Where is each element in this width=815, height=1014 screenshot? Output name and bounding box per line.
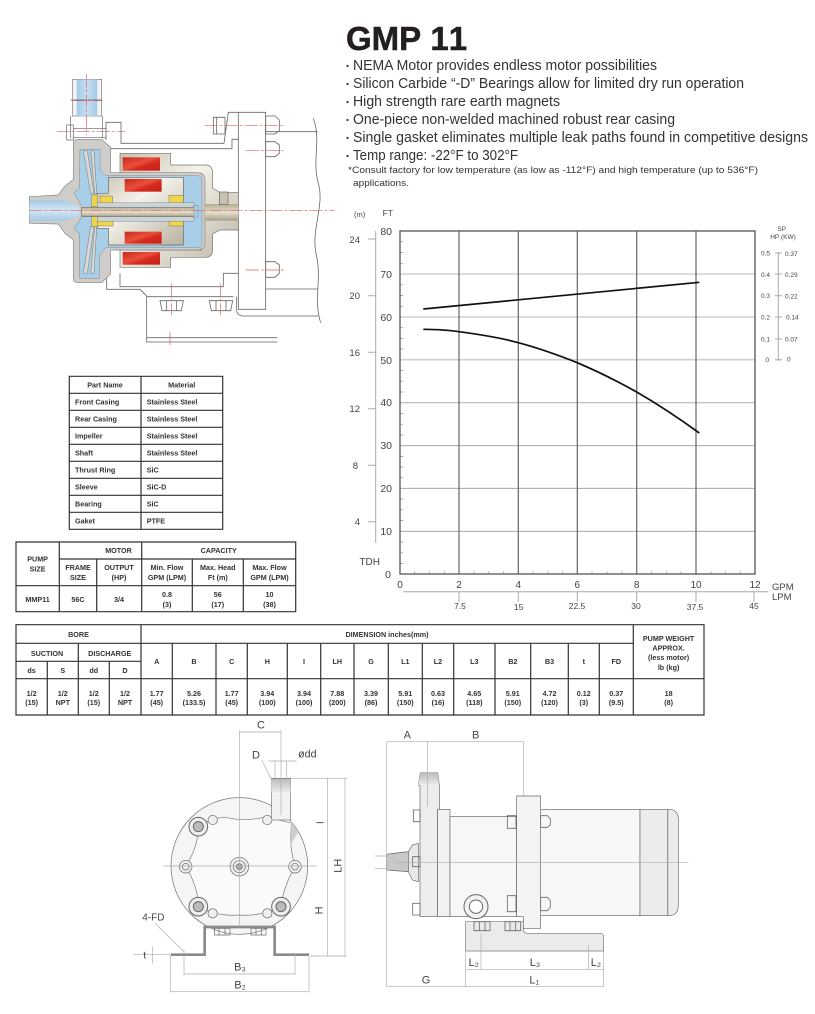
dimension labels <box>404 729 601 986</box>
dimension table: (9.5) <box>609 698 624 707</box>
mounting foot <box>147 297 277 342</box>
materials table: SiC-D <box>147 482 166 492</box>
motor <box>541 809 678 916</box>
materials table: SiC <box>147 500 159 508</box>
dimension table: NPT <box>56 698 71 707</box>
motor and capacity table: 56 <box>214 590 222 599</box>
title: GMP 11 <box>346 20 467 57</box>
materials table: Part Name <box>87 380 123 390</box>
dimension table: (86) <box>365 698 378 707</box>
motor and capacity table <box>16 542 296 612</box>
side port <box>464 895 488 919</box>
dimension table: NPT <box>118 698 133 707</box>
foot plate <box>466 922 604 951</box>
materials table: Front Casing <box>75 398 119 406</box>
dimension table: (133.5) <box>183 698 206 707</box>
metre axis: 24 <box>349 235 360 246</box>
dimension table: 3.39 <box>364 689 378 698</box>
inner magnet rotor <box>97 177 183 245</box>
motor and capacity table: OUTPUT <box>104 563 134 572</box>
plot area grid <box>400 231 755 574</box>
feature bullet list: One-piece non-welded machined robust rear casing <box>353 112 675 128</box>
GPM axis labels: 6 <box>575 580 581 591</box>
metre axis: (m) <box>354 210 366 219</box>
dimension labels <box>142 720 344 992</box>
dimension labels: B₂ <box>234 980 246 992</box>
feet axis labels: 50 <box>380 355 392 367</box>
dimension labels: B₃ <box>234 962 246 974</box>
dimension table: 1/2 <box>27 689 37 698</box>
dimension labels: LH <box>332 859 344 873</box>
dimension table: 0.63 <box>431 689 445 698</box>
motor and capacity table: SIZE <box>70 573 86 582</box>
GPM axis labels: 12 <box>749 580 761 591</box>
pump body <box>171 798 308 934</box>
motor and capacity table: MOTOR <box>105 546 133 555</box>
shaft power axis: 0.4 <box>761 272 770 279</box>
materials table: Stainless Steel <box>147 448 197 458</box>
dimension table: (8) <box>664 698 674 707</box>
dimension labels: G <box>422 974 430 986</box>
materials table: Shaft <box>75 448 94 458</box>
motor and capacity table: MMP11 <box>25 595 50 604</box>
inner and outer magnets <box>123 157 162 265</box>
dimension table: (45) <box>225 698 239 707</box>
feet axis labels: 10 <box>380 526 392 538</box>
LPM axis: GPM <box>772 582 794 593</box>
dimension table: APPROX. <box>652 644 685 652</box>
dimension table: L3 <box>470 657 478 666</box>
motor and capacity table: (38) <box>263 600 276 609</box>
motor and capacity table: Min. Flow <box>151 563 184 572</box>
dimension table: B2 <box>508 657 517 666</box>
dimension table: 7.88 <box>330 689 344 698</box>
dimension table: (less motor) <box>648 653 690 662</box>
feet axis labels: 20 <box>380 483 392 495</box>
GPM axis labels: 0 <box>397 580 403 591</box>
inlet passage <box>29 200 79 221</box>
footnote <box>348 165 758 189</box>
dimension table: (100) <box>296 698 313 707</box>
shaft power axis: 0.1 <box>761 336 770 344</box>
metre axis: 12 <box>349 404 360 415</box>
feet axis labels: 70 <box>380 269 392 281</box>
shaft <box>82 192 238 221</box>
LPM axis <box>403 582 794 612</box>
LPM axis: 37.5 <box>687 602 704 612</box>
bolts <box>413 810 550 931</box>
dimension lines <box>133 730 347 993</box>
motor and capacity table: (3) <box>163 600 172 609</box>
feature bullet list: High strength rare earth magnets <box>353 94 560 110</box>
dimension labels: I <box>314 821 325 824</box>
dimension table: (16) <box>432 698 445 707</box>
dimension table: 5.91 <box>506 689 520 698</box>
dimension table: SUCTION <box>31 649 63 658</box>
feature bullet list: NEMA Motor provides endless motor possibilities <box>353 58 657 74</box>
dimension table: C <box>229 657 234 666</box>
process fluid chamber <box>74 149 202 278</box>
feet axis labels: FT <box>383 208 393 218</box>
dimension table: (15) <box>25 698 39 707</box>
materials table: Stainless Steel <box>147 414 197 424</box>
feet axis labels: 60 <box>380 312 392 324</box>
dimension table: BORE <box>68 630 89 639</box>
dimension table: 0.37 <box>609 689 623 698</box>
bracket outline <box>106 112 321 323</box>
dimension labels: L₁ <box>529 974 540 986</box>
dimension table: L2 <box>434 657 442 666</box>
feet axis labels: 40 <box>380 397 392 409</box>
side view dimension drawing <box>375 729 688 987</box>
shaft power axis: 0.14 <box>786 314 799 322</box>
GPM axis labels <box>397 580 761 591</box>
dimension labels: B <box>472 729 479 741</box>
metre axis: 16 <box>349 348 360 359</box>
motor and capacity table: Max. Flow <box>252 563 287 572</box>
shaft power axis: 0.3 <box>761 293 770 300</box>
dimension labels: L₂ <box>591 957 601 969</box>
LPM axis: 22.5 <box>569 601 586 611</box>
motor and capacity table: 10 <box>266 590 274 599</box>
materials table: Stainless Steel <box>147 398 197 406</box>
impeller <box>83 151 97 273</box>
dimension table: G <box>368 657 374 666</box>
LPM axis: 15 <box>514 602 524 612</box>
materials table: SiC <box>147 466 159 474</box>
motor and capacity table: Ft (m) <box>208 573 228 582</box>
dimension table: S <box>60 666 65 675</box>
dimension table: 1/2 <box>58 689 68 698</box>
dimension table: (118) <box>466 698 483 707</box>
dimension table: LH <box>333 657 342 666</box>
shaft power axis: 0.29 <box>785 272 798 279</box>
materials table: Material <box>168 380 195 390</box>
dimension table: A <box>154 657 159 666</box>
LPM axis: 45 <box>749 601 759 611</box>
dimension table: 4.72 <box>542 689 556 698</box>
pump cutaway drawing <box>29 74 335 347</box>
feature bullet list: Single gasket eliminates multiple leak paths found in competitive designs <box>353 130 808 146</box>
dimension table: H <box>265 657 270 666</box>
metre axis: 20 <box>349 291 360 302</box>
dimension table: 4.65 <box>467 689 481 698</box>
dimension table: 18 <box>665 689 673 698</box>
dimension labels: ødd <box>298 749 317 761</box>
feature bullet list <box>346 58 808 164</box>
motor and capacity table: PUMP <box>27 554 48 564</box>
dimension table: (150) <box>397 698 414 707</box>
shaft power axis: 0 <box>765 357 769 364</box>
pump casing <box>418 773 517 917</box>
mounting bracket <box>171 926 309 956</box>
shaft power axis: 0.2 <box>761 314 770 322</box>
GPM axis labels: 8 <box>634 580 640 591</box>
dimension table: t <box>583 657 586 666</box>
GPM axis labels: 2 <box>456 580 462 591</box>
dimension labels: H <box>314 906 326 914</box>
LPM axis: 7.5 <box>454 601 466 611</box>
metre axis: 8 <box>353 461 358 472</box>
GPM axis labels: 10 <box>690 580 702 591</box>
dimension table: 0.12 <box>577 689 591 698</box>
dimension table: 1/2 <box>120 689 130 698</box>
motor and capacity table: 0.8 <box>162 590 172 599</box>
dimension table: 1/2 <box>89 689 99 698</box>
head curve <box>423 329 699 433</box>
dimension table: (45) <box>150 698 164 707</box>
dimension table: (120) <box>541 698 558 707</box>
dimension labels: L₂ <box>468 957 479 969</box>
dimension table: PUMP WEIGHT <box>643 634 695 643</box>
bolts <box>160 116 279 311</box>
footnote: *Consult factory for low temperature (as low as -112°F) and high temperature (up to 536°F) <box>348 165 758 176</box>
inlet <box>387 843 418 882</box>
feet axis labels: 80 <box>380 226 392 238</box>
materials table: Bearing <box>75 500 102 508</box>
dimension table <box>16 625 704 715</box>
dimension table: B3 <box>545 657 554 666</box>
feature bullet list: Silicon Carbide “-D” Bearings allow for limited dry run operation <box>353 76 744 92</box>
materials table: Thrust Ring <box>75 466 115 474</box>
feet axis labels: 0 <box>385 569 391 581</box>
materials table: Sleeve <box>75 482 98 492</box>
motor and capacity table: GPM (LPM) <box>148 573 187 582</box>
dimension table: B <box>191 657 197 666</box>
discharge port <box>272 778 291 820</box>
dimension labels: C <box>257 720 265 732</box>
materials table <box>69 376 223 529</box>
dimension table: (200) <box>329 698 346 707</box>
shaft power axis: HP (KW) <box>770 234 796 241</box>
dimension table: 5.91 <box>398 689 412 698</box>
dimension table: dd <box>89 666 98 675</box>
dimension labels: D <box>252 750 260 762</box>
materials table: PTFE <box>147 516 165 526</box>
front view dimension drawing <box>133 720 347 993</box>
materials table: Gaket <box>75 516 96 526</box>
bearings <box>92 195 183 227</box>
shaft power axis: 0.22 <box>785 294 798 300</box>
performance chart <box>349 208 799 612</box>
GPM axis labels: 4 <box>516 580 522 591</box>
motor and capacity table: FRAME <box>65 563 91 572</box>
feet axis labels <box>359 208 393 581</box>
dimension table: (3) <box>579 698 589 707</box>
dimension table: I <box>303 657 305 666</box>
dimension table: FD <box>612 657 621 666</box>
dimension table: (100) <box>259 698 276 707</box>
dimension table: D <box>122 666 128 675</box>
discharge fitting <box>67 79 107 140</box>
LPM axis: LPM <box>772 592 792 603</box>
metre axis <box>349 210 376 543</box>
motor and capacity table: SIZE <box>30 564 46 574</box>
dimension labels: 4-FD <box>142 912 164 923</box>
shaft power axis: SP <box>777 226 786 233</box>
centre lines <box>29 74 335 347</box>
shaft power axis: 0.37 <box>785 251 798 258</box>
dimension table: (150) <box>504 698 522 707</box>
dimension labels: L₃ <box>530 957 540 969</box>
dimension lines <box>375 742 688 987</box>
dimension table: ds <box>27 666 36 675</box>
bolts <box>179 815 301 918</box>
materials table: Impeller <box>75 432 103 440</box>
outer magnet carrier and motor shaft <box>120 153 238 267</box>
motor and capacity table: 3/4 <box>114 595 124 604</box>
dimension table: (15) <box>87 698 101 707</box>
LPM axis: 30 <box>631 601 641 611</box>
metre axis: 4 <box>355 517 360 528</box>
dimension table: 3.94 <box>297 689 311 698</box>
casing <box>29 139 205 283</box>
dimension table: L1 <box>401 657 409 666</box>
dimension table: 1.77 <box>150 689 164 698</box>
feature bullet list: Temp range: -22°F to 302°F <box>353 148 518 164</box>
materials table: Rear Casing <box>75 414 117 424</box>
dimension table: 5.26 <box>187 689 201 698</box>
feet axis labels: 30 <box>380 440 392 452</box>
feet axis labels: TDH <box>359 557 380 568</box>
dimension table: 1.77 <box>225 689 239 698</box>
shaft power axis: 0 <box>787 356 791 364</box>
motor and capacity table: (HP) <box>112 573 127 582</box>
dimension labels: A <box>404 729 412 741</box>
motor flange <box>517 796 541 928</box>
dimension table: lb (kg) <box>658 663 680 672</box>
dimension table: 3.94 <box>260 689 274 698</box>
dimension table: DISCHARGE <box>88 649 131 658</box>
power curve <box>423 282 699 309</box>
materials table: Stainless Steel <box>147 432 197 440</box>
motor and capacity table: 56C <box>71 595 85 604</box>
motor and capacity table: CAPACITY <box>201 546 237 555</box>
shaft power axis: 0.07 <box>785 336 798 344</box>
motor and capacity table: GPM (LPM) <box>250 573 289 582</box>
motor and capacity table: (17) <box>211 600 225 609</box>
shaft power axis: 0.5 <box>761 250 770 258</box>
shaft power axis <box>761 226 799 364</box>
dimension table: DIMENSION inches(mm) <box>345 630 429 639</box>
dimension labels: t <box>143 950 146 961</box>
motor and capacity table: Max. Head <box>200 563 236 572</box>
footnote: applications. <box>353 178 409 189</box>
